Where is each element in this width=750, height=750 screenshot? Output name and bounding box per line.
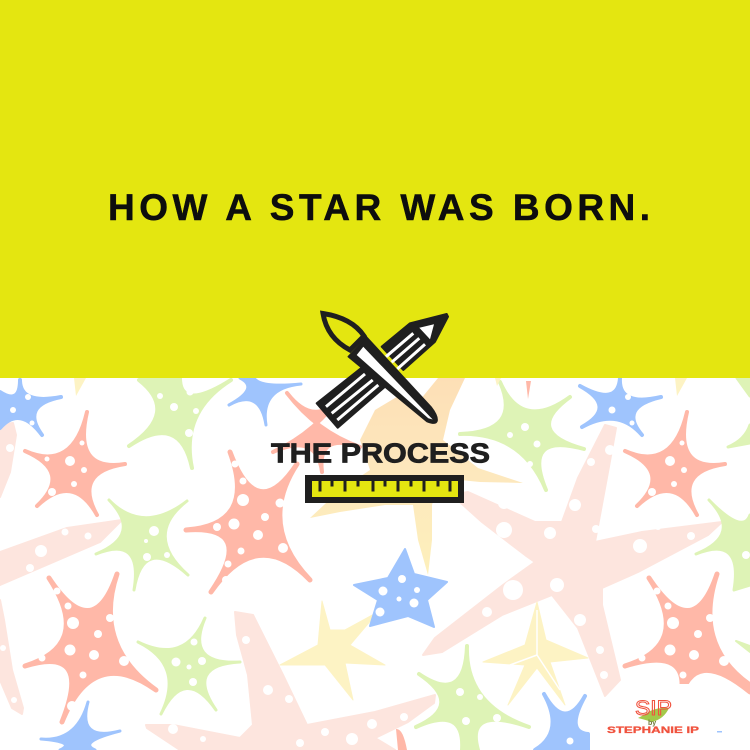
- white area behind signature logo: [622, 684, 750, 750]
- brush head: [323, 314, 364, 350]
- starfish: pale bottom centre: [146, 612, 435, 750]
- starfish: green middle left: [96, 500, 188, 590]
- starfish: pale large left: [0, 423, 122, 714]
- starfish: blue centre: [354, 549, 447, 627]
- brush handle: [348, 337, 437, 423]
- starfish: green top right edge: [728, 378, 750, 447]
- starfish: salmon upper left: [25, 412, 125, 515]
- starfish: salmon lower right: [625, 574, 750, 700]
- yellow header panel: [0, 0, 750, 378]
- starfish: salmon behind icon: [273, 390, 360, 472]
- logo: SIP by Stephanie Ip: [607, 697, 700, 736]
- icon: crossed paintbrush and pencil: [317, 314, 448, 428]
- icon: ruler: [305, 475, 464, 503]
- starfish: salmon lower left: [25, 574, 156, 722]
- starfish: green lower left: [138, 618, 240, 714]
- starfish: small salmon bottom: [396, 729, 407, 750]
- starfish: green top centre right: [460, 382, 584, 490]
- starfish: green top: [129, 378, 231, 468]
- starfish: orange yellow behind logo: [310, 378, 523, 575]
- heading: the process: THE PROCESS: [271, 438, 490, 468]
- starfish: salmon upper right: [625, 412, 725, 515]
- logo SIP: SIP: [635, 697, 672, 720]
- starfish: yellow lower right: [483, 602, 588, 705]
- starfish: blue top left: [0, 380, 61, 435]
- starfish: salmon centre: [186, 452, 310, 592]
- starfish: yellow lower centre: [280, 601, 385, 700]
- title: HOW A STAR WAS BORN.: [108, 187, 650, 228]
- logo leaf: [638, 708, 669, 722]
- starfish: blue bottom right: [535, 694, 588, 750]
- starfish: small salmon tip top: [526, 381, 531, 399]
- starfish: green right edge: [696, 500, 750, 590]
- starfish: pale large right: [423, 425, 722, 696]
- starfish: blue top right: [580, 378, 661, 435]
- starfish: blue upper centre: [229, 378, 301, 425]
- blue dash mark: [717, 731, 722, 732]
- pencil lower body: [317, 365, 385, 428]
- starfish: small yellow tips top: [74, 378, 687, 396]
- logo name: STEPHANIE IP: [607, 725, 700, 736]
- starfish pattern: [0, 378, 750, 750]
- pencil upper body: [382, 314, 448, 370]
- starfish: blue bottom left: [41, 702, 120, 750]
- starfish: green bottom centre: [416, 646, 529, 750]
- starfish: green right tip: [736, 641, 750, 652]
- logo by: by: [648, 720, 656, 727]
